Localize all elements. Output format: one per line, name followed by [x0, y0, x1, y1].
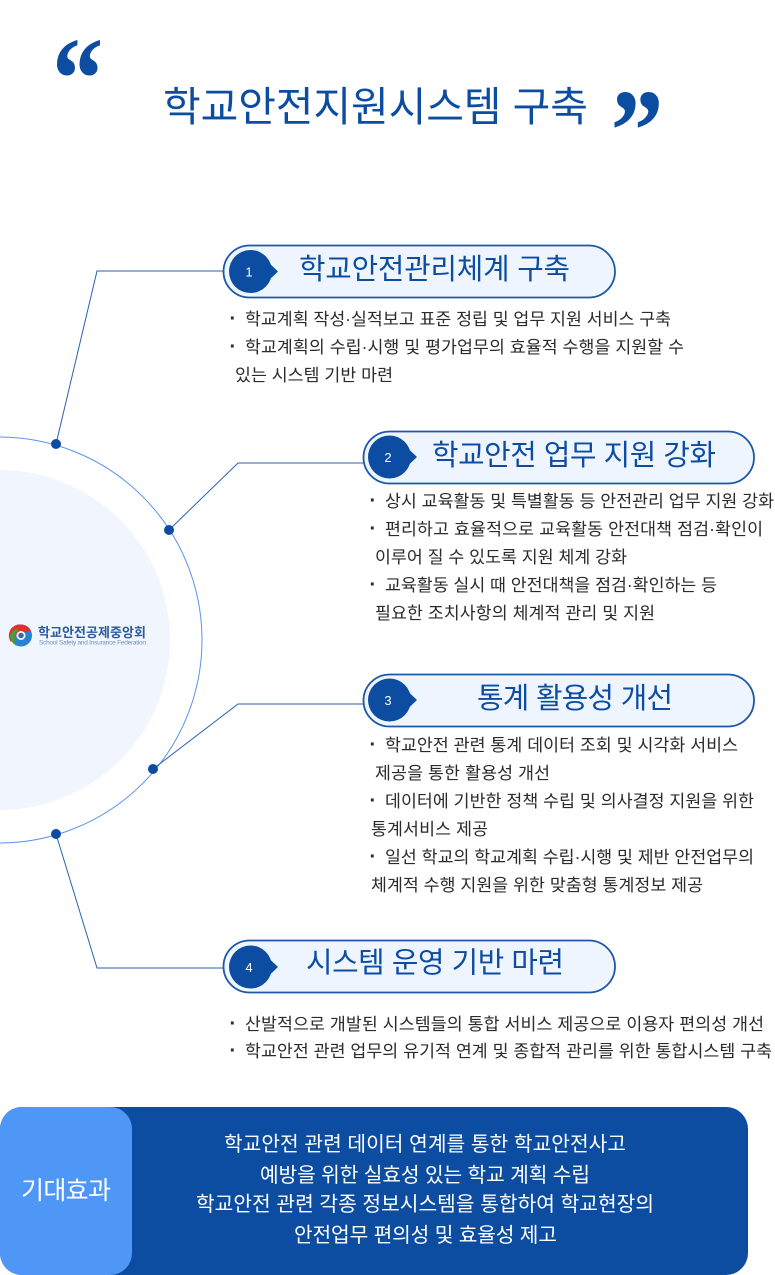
item 2 text: 편리하고 효율적으로 교육활동 안전대책 점검·확인이 [385, 519, 763, 539]
panel: item 3 [364, 674, 754, 895]
item 4 text: · [230, 1040, 236, 1062]
heading pill 3: 3 [384, 693, 392, 708]
logo name: 학교안전공제중앙회 [38, 625, 146, 640]
item 4 text: · [230, 1013, 236, 1035]
item 3 text: 제공을 통한 활용성 개선 [375, 763, 550, 783]
effects background [0, 1107, 748, 1275]
central circle diagram [0, 437, 202, 843]
logo mark [9, 624, 32, 646]
title block [52, 12, 664, 197]
heading pill 4: 시스템 운영 기반 마련 [306, 948, 564, 980]
heading pill 2: 2 [384, 450, 392, 465]
item 3 text [370, 734, 754, 895]
item 4 text: 학교안전 관련 업무의 유기적 연계 및 종합적 관리를 위한 통합시스템 구축 [245, 1041, 772, 1061]
heading pill 3: 통계 활용성 개선 [477, 683, 673, 715]
outer ring [0, 437, 202, 843]
logo [9, 624, 146, 646]
heading pill 4 [224, 940, 615, 992]
heading pill 1 [224, 246, 615, 298]
effects text [196, 1133, 654, 1247]
item 2 text: 필요한 조치사항의 체계적 관리 및 지원 [375, 603, 655, 623]
effects text: 안전업무 편의성 및 효율성 제고 [294, 1224, 557, 1247]
item 3 text: · [370, 846, 376, 868]
item 2 text: · [370, 490, 376, 512]
connector lines [56, 271, 364, 968]
item 3 text: 학교안전 관련 통계 데이터 조회 및 시각화 서비스 [385, 735, 738, 755]
item 1 text: · [230, 336, 236, 358]
item 2 text: 상시 교육활동 및 특별활동 등 안전관리 업무 지원 강화 [385, 491, 774, 511]
panel: item 4 [224, 940, 772, 1062]
item 1 text: 학교계획 작성·실적보고 표준 정립 및 업무 지원 서비스 구축 [245, 309, 671, 329]
heading pill 2: 학교안전 업무 지원 강화 [432, 440, 716, 472]
heading pill 1: 학교안전관리체계 구축 [299, 254, 570, 286]
item 4 text [230, 1013, 772, 1062]
item 3 text: · [370, 790, 376, 812]
effects label box [0, 1107, 132, 1275]
effects text: 학교안전 관련 각종 정보시스템을 통합하여 학교현장의 [196, 1193, 654, 1216]
heading pill 3 [364, 674, 754, 726]
item 2 text: · [370, 574, 376, 596]
connector 1 [56, 271, 224, 444]
item 3 text: · [370, 734, 376, 756]
connector 3 [153, 704, 364, 769]
panel: item 1 [224, 246, 684, 385]
heading pill 1: 1 [245, 264, 253, 280]
item 1 text: · [230, 308, 236, 330]
icon: opening quote: “ [52, 12, 103, 144]
item 1 text [230, 308, 684, 385]
item 3 text: 통계서비스 제공 [371, 819, 488, 839]
title: 학교안전지원시스템 구축 [163, 84, 588, 130]
item 3 text: 체계적 수행 지원을 위한 맞춤형 통계정보 제공 [371, 875, 703, 895]
heading pill 4: 4 [245, 960, 253, 975]
connector 2 [169, 463, 364, 530]
item 2 text: 교육활동 실시 때 안전대책을 점검·확인하는 등 [385, 575, 717, 595]
item 2 text: · [370, 518, 376, 540]
item 2 text [370, 490, 774, 623]
connector dots [51, 439, 174, 839]
effects text: 예방을 위한 실효성 있는 학교 계획 수립 [260, 1164, 590, 1187]
item 4 text: 산발적으로 개발된 시스템들의 통합 서비스 제공으로 이용자 편의성 개선 [245, 1014, 764, 1034]
panel: item 2 [364, 432, 774, 623]
item 2 text: 이루어 질 수 있도록 지원 체계 강화 [375, 547, 627, 567]
item 1 text: 있는 시스템 기반 마련 [235, 365, 393, 385]
connector 4 [56, 834, 224, 968]
item 1 text: 학교계획의 수립·시행 및 평가업무의 효율적 수행을 지원할 수 [245, 337, 684, 357]
item 3 text: 데이터에 기반한 정책 수립 및 의사결정 지원을 위한 [385, 791, 754, 811]
effects label: 기대효과 [21, 1177, 111, 1205]
inner disc [0, 470, 170, 810]
heading pill 2 [364, 432, 754, 484]
panel: expected effects [0, 1107, 748, 1275]
logo subtitle: School Safety and Insurance Federation [39, 640, 146, 646]
item 3 text: 일선 학교의 학교계획 수립·시행 및 제반 안전업무의 [385, 847, 754, 867]
icon: closing quote: ” [610, 66, 664, 197]
effects text: 학교안전 관련 데이터 연계를 통한 학교안전사고 [224, 1133, 626, 1156]
